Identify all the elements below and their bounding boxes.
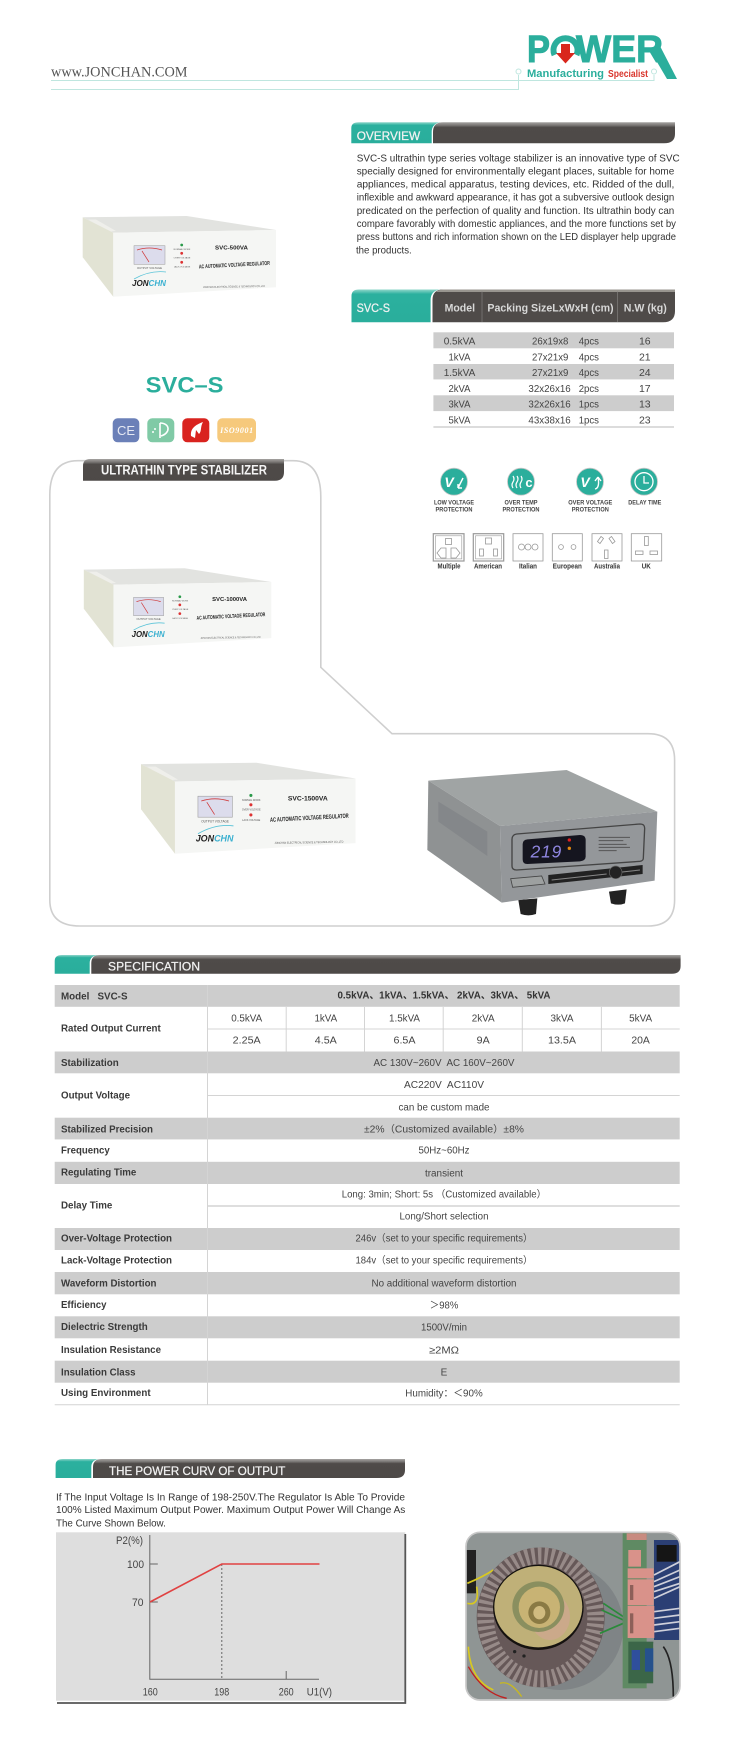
product photo: SVC-1000VA: JONCHN (132, 630, 165, 639)
packing table rows: 27x21x9 (532, 367, 569, 379)
row values: 2kVA (472, 1013, 495, 1024)
product photo: SVC-1500VA: SVC-1500VA (288, 795, 328, 803)
overview text: inflexible and awkward appearance, it has got a subversive outlook design (357, 192, 674, 204)
packing table rows: 4pcs (579, 351, 599, 363)
packing table rows: 17 (639, 383, 651, 395)
packing table rows: 2kVA (448, 383, 470, 395)
power curve chart: 160 (143, 1687, 158, 1699)
row values: 2.25A (233, 1035, 261, 1046)
packing table rows: 32x26x16 (528, 399, 571, 411)
packing table header: SVC-S (357, 301, 390, 315)
logo: POWER Manufacturing Specialist (527, 29, 677, 80)
overview text: specially designed for environmentally elegant places, suitable for home (357, 166, 674, 178)
row labels: Stabilization (61, 1058, 119, 1069)
row values: 50Hz~60Hz (418, 1146, 470, 1157)
row values: Long/Short selection (400, 1212, 488, 1223)
row labels: Over-Voltage Protection (61, 1234, 172, 1245)
row labels: Using Environment (61, 1388, 151, 1399)
row labels: Waveform Distortion (61, 1279, 156, 1290)
overview text: compare favorably with domestic appliances, and the more functions set by (357, 218, 677, 230)
website address: www.JONCHAN.COM (51, 64, 188, 80)
feature icon labels: PROTECTION (572, 506, 609, 514)
row labels: Model SVC-S (61, 991, 128, 1002)
feature icon labels: PROTECTION (436, 506, 473, 514)
packing table rows: 23 (639, 414, 651, 426)
row labels: Output Voltage (61, 1090, 130, 1101)
product photo: SVC-1500VA: AC AUTOMATIC VOLTAGE REGULATOR (270, 813, 349, 824)
row values: Long: 3min; Short: 5s （Customized available） (342, 1189, 546, 1201)
product photo: grey stabilizer with LED display: 219 (530, 842, 562, 862)
row labels: Rated Output Current (61, 1024, 161, 1035)
socket labels: European (553, 562, 582, 571)
feature icon labels: OVER VOLTAGE (568, 500, 612, 507)
socket icons (433, 534, 662, 561)
socket labels: Multiple (438, 562, 460, 571)
logo: POWER Manufacturing Specialist: P (527, 29, 550, 71)
product photo: SVC-500VA: OUTPUT VOLTAGE (137, 266, 162, 270)
row values: 0.5kVA、1kVA、1.5kVA、 2kVA、3kVA、 5kVA (338, 990, 550, 1002)
packing table rows: 4pcs (579, 367, 599, 379)
packing table header: N.W (kg) (624, 303, 667, 315)
row values: Humidity：＜90% (405, 1388, 483, 1399)
product photo: SVC-1000VA: OVER VOLTAGE (172, 608, 189, 611)
feature icon labels: PROTECTION (502, 506, 540, 514)
packing table rows: 43x38x16 (528, 414, 571, 426)
overview text (356, 152, 680, 256)
product photo: SVC-500VA: LACK VOLTAGE (174, 266, 191, 268)
feature icon labels: LOW VOLTAGE (434, 500, 474, 507)
product photo: SVC-1500VA: OUTPUT VOLTAGE (201, 819, 229, 823)
product photo: SVC-1000VA: OUTPUT VOLTAGE (136, 617, 161, 621)
row values: AC 130V~260V AC 160V~260V (374, 1058, 515, 1069)
packing table rows: 16 (639, 336, 651, 348)
row values: ＞98% (430, 1301, 458, 1312)
packing table rows: 21 (639, 351, 651, 363)
feature icon labels: DELAY TIME (628, 500, 661, 507)
certification badges (113, 418, 256, 442)
product photo: SVC-500VA (83, 216, 276, 297)
panel heading: ultrathin type stabilizer (83, 459, 284, 481)
overview text: predicated on the perfection of quality and function. Its ultrathin body can (357, 205, 674, 217)
specification table (55, 985, 680, 1405)
packing table rows: 5kVA (448, 414, 470, 426)
row values: 1.5kVA (389, 1013, 420, 1024)
row labels: Insulation Class (61, 1367, 136, 1378)
product photo: SVC-1000VA: SVC-1000VA (212, 597, 247, 603)
shaded rows (55, 985, 680, 1383)
power curve header bar: THE POWER CURV OF OUTPUT (109, 1464, 286, 1478)
packing table rows: 13 (639, 399, 651, 411)
product photo: grey stabilizer with LED display (427, 770, 657, 915)
overview header bar (351, 122, 675, 143)
power curve chart (56, 1532, 405, 1703)
row labels: Dielectric Strength (61, 1322, 148, 1333)
packing table header: Model (445, 303, 475, 315)
certification badges: CE (117, 423, 135, 438)
packing table rows: 1.5kVA (444, 367, 475, 379)
product photo: SVC-500VA: JONCHN (132, 279, 166, 288)
power curve chart: 70 (132, 1597, 144, 1609)
feature icons (440, 468, 658, 495)
product photo: SVC-1500VA: OVER VOLTAGE (242, 809, 261, 812)
logo: POWER Manufacturing Specialist: WER (576, 29, 663, 71)
row values: 3kVA (550, 1013, 574, 1024)
feature icon labels (434, 500, 661, 514)
row values: 184v（set to your specific requirements） (356, 1255, 532, 1267)
overview text: appliances, medical apparatus, testing devices, etc. Ridded of the dull, (357, 179, 674, 191)
logo: POWER Manufacturing Specialist: Specialist (608, 68, 648, 80)
power curve chart: 260 (279, 1687, 294, 1699)
feature icon labels: OVER TEMP (504, 500, 538, 507)
overview text: press buttons and rich information shown on the LED displayer help upgrade (357, 231, 676, 243)
product photo: SVC-500VA: SVC-500VA (215, 246, 248, 252)
header rule lines (51, 69, 656, 90)
packing table rows: 4pcs (579, 336, 599, 348)
packing table rows (433, 332, 674, 428)
socket labels: Australia (594, 562, 621, 571)
product photo: SVC-1500VA: JONCHAN ELECTRICAL SCIENCE & TECHNOLOGY CO.,LTD (274, 840, 343, 845)
row values: 246v（set to your specific requirements） (356, 1233, 532, 1245)
overview text: the products. (356, 244, 412, 256)
row values: ≥2MΩ (429, 1345, 460, 1356)
product photo: SVC-500VA: NORMAL WORK (174, 248, 191, 251)
row values: transient (425, 1168, 463, 1179)
row labels: Delay Time (61, 1201, 113, 1212)
row labels: Frequency (61, 1146, 110, 1157)
feature icons: V (444, 474, 455, 490)
power curve chart: P2(%) (116, 1535, 143, 1547)
row values: can be custom made (398, 1102, 490, 1113)
certification badges: ISO9001 (219, 426, 253, 435)
product photo: SVC-1500VA: JONCHN (196, 834, 234, 844)
row values: 1500V/min (421, 1323, 467, 1334)
row values: AC220V AC110V (404, 1080, 484, 1091)
row values (231, 990, 652, 1399)
row labels: Lack-Voltage Protection (61, 1256, 172, 1267)
row values: 20A (631, 1035, 650, 1046)
specification header bar (55, 955, 681, 974)
packing table rows: 27x21x9 (532, 351, 569, 363)
row labels: Stabilized Precision (61, 1124, 153, 1135)
product name SVC-S: SVC–S (146, 372, 224, 398)
packing table header (352, 290, 675, 322)
row labels: Regulating Time (61, 1168, 137, 1179)
row values: ±2%（Customized available）±8% (364, 1123, 524, 1135)
packing table rows: 24 (639, 367, 651, 379)
main panel outline (50, 461, 675, 926)
packing table rows: 1pcs (579, 414, 599, 426)
specification header bar: SPECIFICATION (108, 960, 200, 974)
row values: 0.5kVA (231, 1013, 263, 1024)
socket labels: UK (642, 562, 651, 571)
feature icons: V (580, 474, 591, 490)
row values: E (441, 1367, 448, 1378)
product photo: SVC-1000VA (84, 568, 271, 647)
packing table rows: 2pcs (579, 383, 599, 395)
product photo: SVC-1500VA (141, 763, 356, 854)
product photo: SVC-500VA: AC AUTOMATIC VOLTAGE REGULATOR (199, 261, 270, 270)
packing table rows: 32x26x16 (528, 383, 571, 395)
packing table rows: 1kVA (448, 351, 470, 363)
packing table rows: 3kVA (448, 399, 470, 411)
product photo: SVC-1500VA: LACK VOLTAGE (242, 819, 261, 822)
product photo: SVC-500VA: JONCHAN ELECTRICAL SCIENCE & TECHNOLOGY CO.,LTD (203, 284, 265, 289)
packing table rows: 0.5kVA (444, 336, 475, 348)
power curve description: If The Input Voltage Is In Range of 198-250V.The Regulator Is Able To Provide (56, 1491, 405, 1503)
logo: POWER Manufacturing Specialist: Manufacturing (527, 68, 604, 80)
power curve description: The Curve Shown Below. (56, 1517, 166, 1529)
row values: No additional waveform distortion (372, 1279, 516, 1290)
row values: 1kVA (314, 1013, 337, 1024)
product photo: SVC-1500VA: NORMAL WORK (242, 799, 261, 802)
product photo: SVC-1000VA: AC AUTOMATIC VOLTAGE REGULATOR (196, 612, 266, 622)
packing table rows: 1pcs (579, 399, 599, 411)
packing table header: Packing SizeLxWxH (cm) (487, 303, 614, 315)
socket labels (438, 562, 651, 571)
power curve description: 100% Listed Maximum Output Power. Maximum Output Power Will Change As (56, 1504, 405, 1516)
product photo: SVC-1000VA: NORMAL WORK (172, 600, 189, 603)
photo: transformer interior (466, 1532, 680, 1700)
row labels: Insulation Resistance (61, 1345, 161, 1356)
power curve description (56, 1491, 405, 1529)
overview text: SVC-S ultrathin type series voltage stabilizer is an innovative type of SVC (357, 152, 680, 164)
product photo: SVC-1000VA: LACK VOLTAGE (172, 617, 189, 620)
packing table rows: 26x19x8 (532, 336, 569, 348)
power curve chart: 100 (127, 1559, 144, 1571)
row values: 9A (477, 1035, 490, 1046)
power curve chart: U1(V) (307, 1687, 332, 1699)
product photo: SVC-1000VA: JONCHAN ELECTRICAL SCIENCE & TECHNOLOGY CO.,LTD (200, 636, 261, 640)
row labels: Efficiency (61, 1300, 107, 1311)
row values: 5kVA (629, 1013, 652, 1024)
row values: 4.5A (315, 1035, 337, 1046)
row values: 13.5A (548, 1035, 576, 1046)
socket labels: American (474, 562, 502, 571)
overview header bar: OVERVIEW (357, 129, 421, 143)
table rules (55, 985, 680, 1405)
feature icons: c (525, 475, 533, 490)
row values: 6.5A (394, 1035, 416, 1046)
socket labels: Italian (519, 562, 537, 571)
product photo: SVC-500VA: OVER VOLTAGE (174, 256, 191, 260)
power curve header bar (56, 1459, 405, 1478)
row labels (61, 991, 172, 1399)
panel heading: ultrathin type stabilizer: ULTRATHIN TYPE STABILIZER (101, 462, 267, 477)
power curve chart: 198 (214, 1687, 229, 1699)
